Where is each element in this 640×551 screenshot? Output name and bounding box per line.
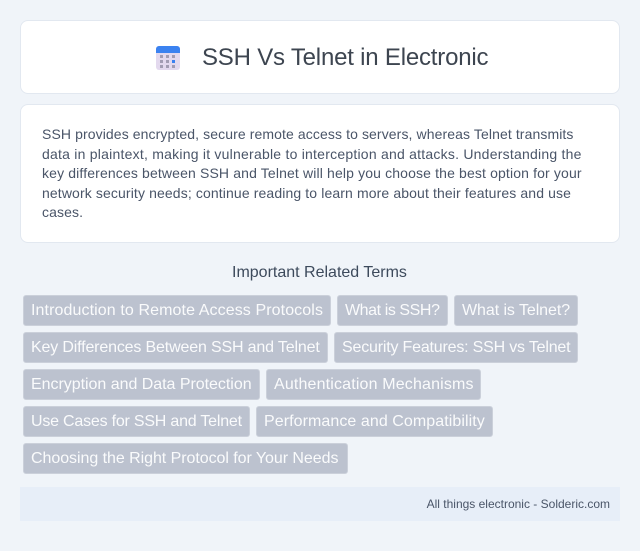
tag <box>337 295 448 326</box>
tag <box>23 295 331 326</box>
tag: Use Cases for SSH and Telnet <box>31 413 242 430</box>
tag: Encryption and Data Protection <box>31 376 252 393</box>
tag <box>23 332 328 363</box>
tag: Authentication Mechanisms <box>274 376 474 393</box>
intro text panel <box>20 104 620 243</box>
intro text block: data in plaintext, making it vulnerable to interception and attacks. Understanding the <box>42 146 582 162</box>
intro text block: SSH provides encrypted, secure remote access to servers, whereas Telnet transmits <box>42 126 574 142</box>
tag <box>23 369 260 400</box>
tag <box>23 443 348 474</box>
intro text block <box>42 126 582 220</box>
title: SSH Vs Telnet in Electronic <box>202 44 488 71</box>
tag: Performance and Compatibility <box>264 413 485 430</box>
intro text block: cases. <box>42 204 83 220</box>
footer bar <box>20 487 620 521</box>
footer text: All things electronic - Solderic.com <box>427 497 610 511</box>
header panel <box>20 20 620 94</box>
tag: Choosing the Right Protocol for Your Needs <box>31 450 338 467</box>
tag <box>266 369 481 400</box>
tag: Security Features: SSH vs Telnet <box>342 339 570 356</box>
tag <box>454 295 578 326</box>
intro text block: key differences between SSH and Telnet will help you choose the best option for your <box>42 165 582 181</box>
related terms tags <box>23 295 578 474</box>
intro text block: network security needs; continue reading to learn more about their features and use <box>42 184 571 200</box>
tag: What is Telnet? <box>462 302 570 319</box>
tag: Introduction to Remote Access Protocols <box>31 302 323 319</box>
tag: What is SSH? <box>345 302 440 319</box>
tag: Key Differences Between SSH and Telnet <box>31 339 320 356</box>
tag <box>23 406 250 437</box>
tag <box>334 332 578 363</box>
heading: important related terms: Important Related Terms <box>232 264 407 281</box>
icon: calendar grid <box>156 46 180 70</box>
tag <box>256 406 493 437</box>
